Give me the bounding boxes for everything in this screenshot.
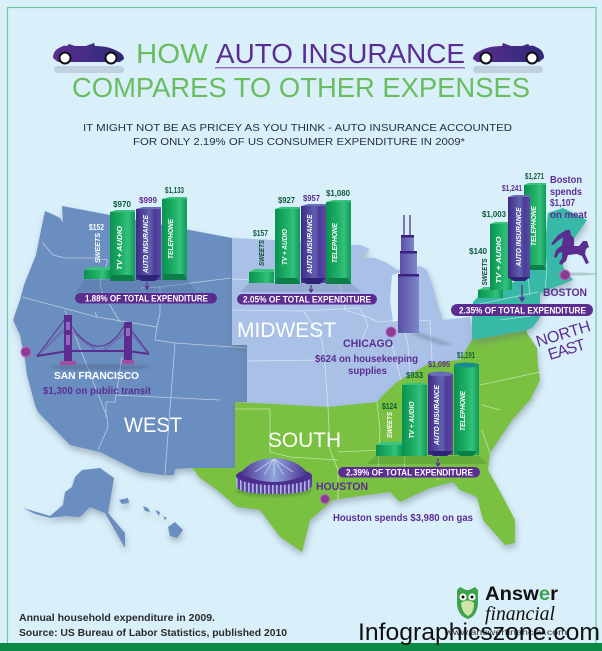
expenditure pill: 2.05% OF TOTAL EXPENDITURE bbox=[243, 295, 371, 305]
source note: Annual household expenditure in 2009. bbox=[19, 613, 215, 624]
text: boston spends: on meat bbox=[550, 210, 588, 221]
vertical labels: SWEETS bbox=[385, 412, 394, 438]
values: $999 bbox=[139, 196, 158, 205]
vertical labels: AUTO INSURANCE bbox=[514, 207, 523, 267]
right car icon bbox=[473, 43, 544, 73]
vertical labels: TELEPHONE bbox=[330, 222, 339, 263]
values: $157 bbox=[253, 229, 268, 238]
vertical labels: TELEPHONE bbox=[166, 218, 175, 259]
source note: Source: US Bureau of Labor Statistics, published 2010 bbox=[19, 628, 287, 639]
vertical labels: SWEETS bbox=[93, 233, 102, 263]
text: boston spends: $1,107 bbox=[550, 198, 575, 209]
values: $140 bbox=[469, 247, 488, 256]
expenditure pill: 1.88% OF TOTAL EXPENDITURE bbox=[85, 294, 208, 304]
vertical labels bbox=[93, 214, 175, 274]
region: south bbox=[192, 330, 540, 552]
text: san francisco bbox=[43, 370, 152, 397]
region: northeast bbox=[472, 208, 587, 340]
values bbox=[469, 172, 544, 256]
text: boston spends: spends bbox=[550, 187, 582, 198]
vertical labels: AUTO INSURANCE bbox=[305, 214, 314, 274]
owl icon bbox=[457, 587, 478, 619]
logo: answer financial: financial bbox=[485, 603, 555, 625]
bar: sweets bbox=[84, 267, 110, 279]
vertical labels bbox=[480, 205, 538, 286]
values: $1,003 bbox=[482, 210, 507, 219]
values: $1,191 bbox=[457, 351, 475, 360]
vertical labels bbox=[257, 214, 339, 274]
bar: auto insurance bbox=[428, 372, 453, 456]
alaska bbox=[23, 468, 125, 548]
title: AUTO INSURANCE bbox=[216, 38, 465, 69]
text: houston bbox=[316, 481, 473, 524]
source note bbox=[19, 613, 287, 639]
values: $1,241 bbox=[502, 184, 522, 193]
values: $970 bbox=[113, 200, 132, 209]
hawaii bbox=[119, 498, 183, 538]
text: chicago: supplies bbox=[348, 366, 387, 377]
icon: boston horse statue bbox=[551, 230, 597, 276]
text: san francisco: SAN FRANCISCO bbox=[54, 370, 139, 382]
vertical labels: TV + AUDIO bbox=[494, 236, 503, 283]
values: $933 bbox=[406, 371, 424, 380]
bar: sweets bbox=[376, 442, 402, 456]
icon: houston astrodome bbox=[236, 458, 312, 497]
values: $1,095 bbox=[428, 360, 450, 369]
title bbox=[72, 38, 530, 103]
title: HOW bbox=[136, 38, 209, 69]
arrow bbox=[309, 285, 313, 292]
bar: telephone bbox=[524, 183, 546, 270]
bar: auto insurance bbox=[136, 207, 161, 281]
text: boston spends bbox=[550, 175, 588, 221]
pin: chicago bbox=[386, 327, 396, 337]
values bbox=[253, 189, 351, 238]
vertical labels: TV + AUDIO bbox=[407, 401, 416, 438]
vertical labels: TV + AUDIO bbox=[280, 229, 289, 265]
vertical labels bbox=[385, 384, 467, 446]
label: midwest: MIDWEST bbox=[237, 319, 336, 342]
label: north east: NORTH bbox=[534, 318, 593, 351]
bar chart: west bbox=[75, 186, 217, 304]
text: chicago: $624 on housekeeping bbox=[315, 354, 418, 365]
left car icon bbox=[53, 43, 124, 73]
expenditure pill: 2.35% OF TOTAL EXPENDITURE bbox=[459, 306, 586, 316]
bar: tv and audio bbox=[402, 383, 427, 456]
values: $1,133 bbox=[165, 186, 184, 195]
region: west bbox=[13, 206, 247, 548]
arrow bbox=[145, 282, 149, 289]
bar: sweets bbox=[249, 269, 274, 283]
bar: tv and audio bbox=[490, 222, 512, 290]
vertical labels: TELEPHONE bbox=[458, 390, 467, 431]
bar: auto insurance bbox=[301, 204, 326, 284]
bar chart: midwest bbox=[237, 189, 377, 305]
bar: telephone bbox=[326, 200, 351, 284]
bar: telephone bbox=[454, 362, 479, 456]
expenditure pill: 2.39% OF TOTAL EXPENDITURE bbox=[346, 468, 473, 478]
bar: telephone bbox=[162, 197, 187, 280]
arrow bbox=[520, 285, 524, 301]
text: chicago bbox=[315, 338, 418, 377]
icon: golden gate bridge bbox=[37, 315, 150, 370]
vertical labels: TV + AUDIO bbox=[115, 226, 124, 270]
pin: boston bbox=[560, 270, 570, 280]
text: boston spends: Boston bbox=[550, 175, 582, 186]
text: san francisco: $1,300 on public transit bbox=[43, 386, 152, 397]
text: houston: HOUSTON bbox=[316, 481, 368, 493]
label: north east: EAST bbox=[546, 336, 588, 364]
logo: answer financial: www.answerfinancial.com bbox=[444, 627, 567, 637]
label: boston: BOSTON bbox=[543, 287, 587, 299]
values bbox=[382, 351, 475, 411]
subtitle: FOR ONLY 2.19% OF US CONSUMER EXPENDITURE IN 2009* bbox=[133, 136, 465, 148]
label: south: SOUTH bbox=[268, 429, 341, 452]
values: $927 bbox=[278, 196, 296, 205]
values bbox=[89, 186, 184, 232]
bar: sweets bbox=[478, 287, 503, 298]
bar: auto insurance bbox=[508, 195, 530, 281]
logo: answer financial: Answer bbox=[485, 584, 559, 605]
values: $152 bbox=[89, 223, 104, 232]
vertical labels: SWEETS bbox=[480, 258, 489, 286]
values: $957 bbox=[303, 194, 321, 203]
text: houston: Houston spends $3,980 on gas bbox=[333, 513, 473, 524]
vertical labels: TELEPHONE bbox=[529, 205, 538, 246]
values: $1,271 bbox=[525, 172, 544, 181]
pin: san francisco bbox=[21, 347, 31, 357]
subtitle bbox=[83, 122, 512, 148]
US map bbox=[13, 206, 587, 552]
bar: tv and audio bbox=[275, 207, 300, 284]
subtitle: IT MIGHT NOT BE AS PRICEY AS YOU THINK - AUTO INSURANCE ACCOUNTED bbox=[83, 122, 512, 134]
vertical labels: AUTO INSURANCE bbox=[141, 214, 150, 274]
region: midwest bbox=[232, 238, 472, 407]
logo: answer financial bbox=[444, 584, 567, 637]
vertical labels: SWEETS bbox=[257, 240, 266, 266]
watermark: Infographicszone.com bbox=[358, 619, 600, 646]
label: west: WEST bbox=[124, 414, 182, 437]
arrow bbox=[436, 458, 440, 466]
vertical labels: AUTO INSURANCE bbox=[432, 384, 441, 446]
values: $124 bbox=[382, 402, 397, 411]
text: chicago: CHICAGO bbox=[343, 338, 393, 350]
icon: chicago skyscraper bbox=[398, 215, 455, 345]
values: $1,080 bbox=[326, 189, 351, 198]
pin: houston bbox=[320, 494, 330, 504]
bar: tv and audio bbox=[110, 210, 135, 281]
bar chart: northeast bbox=[451, 172, 593, 316]
title: COMPARES TO OTHER EXPENSES bbox=[72, 72, 530, 103]
bar chart: south bbox=[338, 351, 488, 478]
